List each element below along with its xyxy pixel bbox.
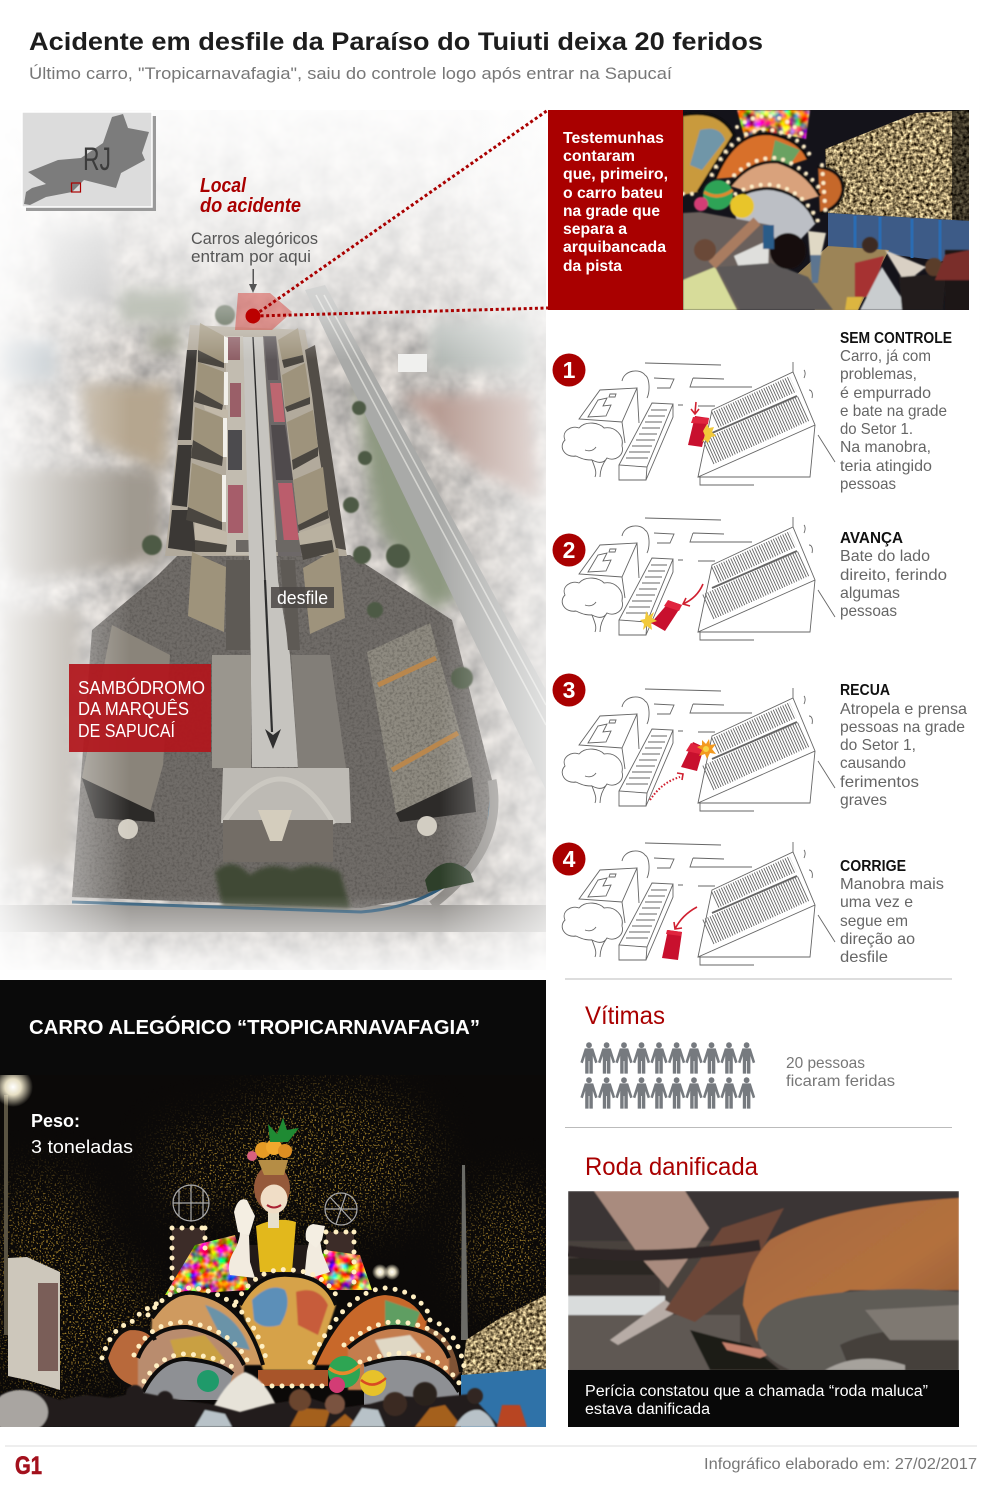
text: step 1: Carro, já com [840, 348, 931, 365]
step 2: avança: 2 [563, 537, 575, 563]
highway [305, 285, 546, 790]
panel: eyewitness text: que, primeiro, [563, 166, 668, 183]
panel: eyewitness text: separa a [563, 221, 627, 238]
fog [0, 110, 546, 360]
text: step 1: problemas, [840, 366, 917, 383]
text: step 4: desfile [840, 949, 888, 966]
text: step 4: CORRIGE [840, 858, 906, 875]
panel: photo of the damaged wheel [568, 1191, 959, 1371]
inset map of Rio de Janeiro state: RJ [83, 141, 111, 177]
step 1: sem controle: 1 [563, 357, 576, 383]
text: float weight [31, 1111, 133, 1157]
text: step 4 [840, 858, 944, 966]
text: step 3: Atropela e prensa [840, 701, 967, 718]
panel: eyewitness text: na grade que [563, 203, 660, 220]
text: step 2 [840, 530, 947, 620]
arrow: parade direction [265, 580, 281, 749]
text: step 3: graves [840, 792, 887, 809]
panel: carro alegórico header [0, 980, 546, 1076]
label: accident location [200, 175, 301, 217]
text: step 1: é empurrado [840, 385, 931, 402]
icon: number 2 [552, 534, 586, 566]
text: step 3: causando [840, 755, 906, 772]
icon: number 3 [552, 674, 586, 706]
label: Sambódromo [69, 664, 211, 752]
step 1: sem controle [552, 330, 952, 493]
panel: photo of the float hitting the fence [683, 110, 971, 310]
icon: number 1 [552, 354, 586, 386]
pole [461, 1165, 468, 1340]
icon array: 20 injured people [580, 1042, 755, 1109]
text: step 1: do Setor 1. [840, 421, 913, 438]
text: step 3: RECUA [840, 682, 890, 699]
feathers [214, 1371, 276, 1413]
step 3: recua: 3 [563, 677, 575, 703]
label: floats entrance [191, 229, 318, 266]
text: step 1 [840, 330, 952, 493]
panel: eyewitness text: contaram [563, 148, 635, 165]
text: step 1: Na manobra, [840, 439, 931, 456]
text: step 1: e bate na grade [840, 403, 947, 420]
figure: Carmen Miranda [165, 1118, 372, 1295]
title: Acidente em desfile da Paraíso do Tuiuti deixa 20 feridos [29, 28, 763, 56]
text: step 2: pessoas [840, 603, 897, 620]
grandstand seats beside the lane [226, 336, 249, 555]
float lights [102, 1228, 465, 1390]
icon: accident location dot [246, 308, 260, 324]
illustration: step 1 [562, 362, 835, 485]
caption: damaged wheel [568, 1370, 959, 1427]
label: Sambódromo: SAMBÓDROMO [78, 677, 205, 698]
text: float weight: Peso: [31, 1111, 80, 1131]
label: accident location: Local [200, 175, 246, 197]
label: floats entrance: entram por aqui [191, 247, 311, 266]
panel: eyewitness text: o carro bateu [563, 185, 663, 202]
lamp post [4, 1095, 8, 1335]
crowd in the foreground [683, 211, 779, 310]
label: desfile direction: desfile [277, 588, 328, 608]
label: Sambódromo: DA MARQUÊS [78, 699, 189, 719]
text: step 1: pessoas [840, 476, 896, 493]
text: step 3 [840, 682, 967, 809]
left sector roofs [188, 323, 228, 632]
text: float weight: 3 toneladas [31, 1137, 133, 1157]
text: step 2: algumas [840, 585, 900, 602]
heading: victims: Vítimas [585, 1002, 665, 1030]
illustration: step 2 [562, 517, 835, 640]
label: Sambódromo: DE SAPUCAÍ [78, 721, 175, 741]
subtitle: Último carro, "Tropicarnavafagia", saiu do controle logo após entrar na Sapucaí [29, 64, 672, 83]
label: floats entrance: Carros alegóricos [191, 229, 318, 248]
text: step 4: direção ao [840, 931, 915, 948]
text: injured count: ficaram feridas [786, 1073, 895, 1090]
wire spheres [173, 1185, 357, 1225]
decorative balls [328, 1356, 360, 1388]
illustration: step 4 [562, 842, 835, 965]
text: step 4: Manobra mais [840, 876, 944, 893]
text: step 2: Bate do lado [840, 548, 930, 565]
panel: eyewitness text [548, 110, 683, 310]
plaza and avenue [72, 555, 492, 908]
panel: eyewitness text: arquibancada [563, 239, 666, 256]
parade lane [243, 337, 298, 767]
stadium strip [165, 325, 347, 556]
text: step 2: AVANÇA [840, 530, 903, 547]
step 4: corrige [552, 842, 944, 966]
caption: damaged wheel: estava danificada [585, 1401, 710, 1418]
panel: eyewitness text: da pista [563, 258, 622, 275]
heading: damaged wheel: Roda danificada [585, 1153, 758, 1181]
icon: number 4 [552, 842, 586, 876]
panel: aerial photo of the Sambódromo [0, 110, 546, 970]
text: step 4: uma vez e [840, 894, 913, 911]
text: injured count [786, 1055, 895, 1090]
confetti [0, 1090, 555, 1405]
trees beside the stadium [142, 305, 473, 689]
text: step 3: do Setor 1, [840, 737, 916, 754]
text: step 1: SEM CONTROLE [840, 330, 952, 347]
text: step 4: segue em [840, 913, 908, 930]
text: step 1: teria atingido [840, 458, 932, 475]
inset map of Rio de Janeiro state [22, 112, 156, 211]
dotted callout lines [255, 110, 548, 316]
panel: photo of the float [0, 1067, 555, 1434]
text: step 3: pessoas na grade [840, 719, 965, 736]
float fans [106, 1275, 461, 1395]
step 3: recua [552, 674, 967, 811]
fans of the float [737, 110, 810, 140]
text: step 2: direito, ferindo [840, 567, 947, 584]
panel: eyewitness text: Testemunhas [563, 130, 664, 147]
text: injured count: 20 pessoas [786, 1055, 865, 1072]
crowd on the right [462, 1295, 546, 1376]
step 4: corrige: 4 [563, 846, 576, 872]
icon: accident highlight at carriage entrance [235, 293, 292, 330]
text: step 3: ferimentos [840, 774, 919, 791]
caption: damaged wheel: Perícia constatou que a chamada “roda maluca” [585, 1383, 928, 1400]
arrow: where floats enter [249, 269, 257, 293]
illustration: step 3 [562, 688, 835, 811]
label: accident location: do acidente [200, 195, 301, 217]
white structure with a screen [8, 1257, 60, 1390]
logo: G1: G1 [15, 1452, 42, 1480]
step 2: avança [552, 517, 947, 640]
right sector roofs [278, 328, 345, 634]
footer date: Infográfico elaborado em: 27/02/2017 [704, 1456, 977, 1473]
crowd in the foreground [0, 1381, 528, 1427]
large roofs [82, 625, 170, 812]
panel: carro alegórico header: CARRO ALEGÓRICO “TROPICARNAVAFAGIA” [29, 1015, 480, 1039]
